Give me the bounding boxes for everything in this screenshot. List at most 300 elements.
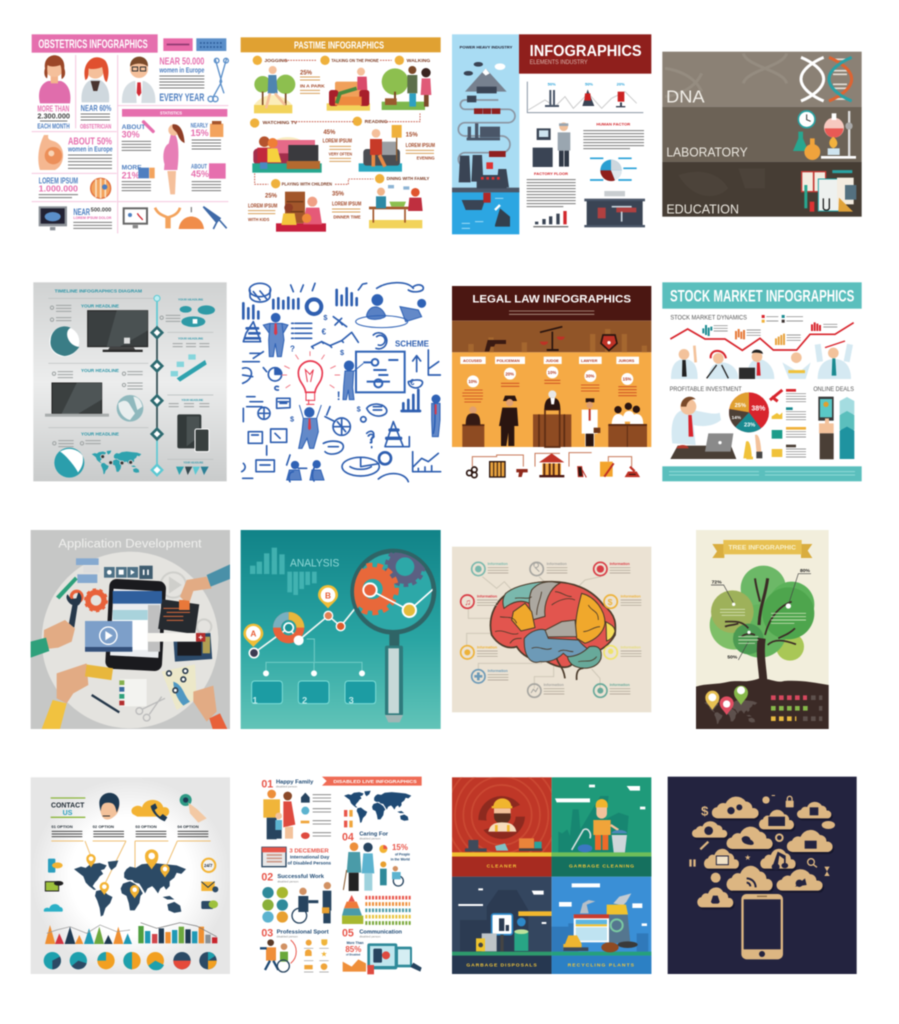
captions: Information	[621, 594, 641, 598]
icon: gun	[485, 340, 506, 351]
scene: reading	[359, 125, 402, 172]
device: monitor	[88, 311, 148, 352]
stats and pointers: 72%	[712, 580, 722, 586]
caring illustration	[343, 842, 403, 891]
captions	[477, 562, 641, 694]
canopy captions	[720, 603, 806, 643]
scene: playing with children	[276, 192, 326, 232]
section headers: 01	[261, 778, 273, 790]
figure: lawyer	[582, 398, 600, 446]
left icons	[44, 859, 63, 912]
step labels: TALKING ON THE PHONE	[331, 58, 379, 64]
step labels: PLAYING WITH CHILDREN	[282, 181, 332, 187]
sport medals: ★	[321, 950, 327, 959]
hand: lower right	[193, 686, 227, 729]
chart: donut	[277, 616, 300, 639]
options: 01 OPTION	[51, 824, 73, 829]
org lines	[266, 639, 362, 672]
mini bar clusters	[702, 322, 837, 345]
headlines: YOUR HEADLINE	[183, 461, 204, 465]
stats and pointers	[711, 568, 811, 661]
ground map	[704, 699, 757, 724]
step labels: WALKING	[407, 58, 430, 64]
section headers	[261, 778, 402, 940]
doodle: charts and small icons: SCHEME	[395, 339, 429, 349]
illustration: brain	[490, 582, 615, 680]
sport medals	[304, 939, 329, 972]
captions: LOREM IPSUM	[332, 201, 362, 207]
percentage text: 30%	[586, 374, 594, 379]
cloud shadows	[693, 799, 834, 909]
tile: tree infographic	[696, 530, 829, 729]
icon: education supplies	[802, 172, 856, 212]
icon: laboratory equipment	[793, 111, 856, 160]
chart: pie 38 23 14 25: 38%	[751, 405, 766, 412]
hand: lower left with card	[42, 663, 113, 729]
icon: cell	[91, 178, 111, 198]
marker: B: B	[325, 590, 331, 600]
panel: education band	[662, 162, 862, 217]
wheelchair handshake	[292, 882, 331, 923]
stat: 15% of people	[379, 843, 410, 862]
doodle: charts and small icons: $	[323, 313, 327, 322]
icon: magnifying glass	[349, 548, 434, 722]
panel: navy	[668, 777, 857, 974]
connector line	[472, 453, 632, 467]
doodle: charts and small icons	[242, 283, 441, 482]
person: woman	[39, 55, 70, 103]
panel: dna band	[662, 52, 862, 107]
role label text: JUDGE	[546, 359, 559, 363]
hand: left with wrench	[31, 620, 75, 658]
map: world	[74, 861, 186, 917]
media player bar	[104, 566, 153, 579]
role labels	[460, 357, 639, 364]
figure: jurors	[608, 403, 647, 447]
panel: industry column: POWER HEAVY INDUSTRY	[460, 44, 513, 49]
captions: LOREM IPSUM	[323, 138, 352, 144]
title: pastime: PASTIME INFOGRAPHICS	[294, 41, 384, 52]
illustration: investor at desk	[670, 397, 736, 459]
title: pastime	[241, 37, 441, 52]
folders 1 2 3: 2	[302, 695, 307, 705]
role label text: POLICEMAN	[497, 359, 520, 363]
headlines: YOUR HEADLINE	[81, 368, 119, 373]
nodes white	[263, 670, 365, 676]
title: stock market	[662, 282, 862, 309]
text: near 50,000: EVERY YEAR	[159, 92, 204, 104]
heading: contact us: CONTACT	[51, 802, 85, 809]
stat: near 500,000: LOREM IPSUM DOLOR	[73, 215, 111, 220]
panel: laboratory band: LABORATORY	[666, 146, 748, 160]
section headers: Happy Family	[276, 780, 313, 786]
icon: support agent	[99, 793, 119, 820]
percentage text: 10%	[468, 379, 477, 384]
section headers: Communication	[359, 929, 402, 935]
captions: 45%	[323, 130, 336, 136]
stat: more than 85%: More Than	[347, 941, 363, 945]
cloud glyph icons	[704, 804, 818, 904]
section headers: disabled person	[277, 879, 299, 883]
icons: hands raised	[743, 435, 762, 459]
tile: business doodles	[241, 282, 441, 482]
folders 1 2 3: 3	[349, 695, 354, 705]
section headers: disabled person	[359, 934, 381, 938]
options: 04 OPTION	[177, 824, 199, 829]
stats: left and right percentages: NEARLY	[191, 122, 208, 129]
percentage text	[468, 370, 631, 384]
hand: right top	[180, 564, 230, 601]
section headers: 03	[261, 928, 273, 940]
timeline spine	[152, 295, 162, 475]
circle icons	[262, 887, 288, 923]
tile: stock market infographics	[662, 282, 862, 481]
person: doctor man	[122, 57, 155, 103]
icon: scales of justice	[540, 327, 565, 351]
chart: pie 38 23 14 25: 23%	[744, 422, 755, 428]
text blocks	[50, 305, 209, 447]
stats: left and right percentages: 21%	[122, 170, 140, 180]
chart: pie 38 23 14 25: 25%	[735, 403, 746, 409]
device: tablet and phone	[177, 414, 209, 452]
row 2 left pair	[33, 282, 441, 482]
phone screen	[173, 633, 212, 662]
chart: line with icons: 50%	[585, 82, 593, 87]
icon: smartphone	[741, 894, 783, 959]
headlines: YOUR HEADLINE	[81, 303, 119, 308]
chart: triangle peaks	[45, 925, 132, 944]
devices illustration	[367, 943, 422, 974]
ghost play icon	[161, 572, 211, 634]
panel: education band: EDUCATION	[666, 202, 739, 216]
tile: contact us	[31, 777, 230, 974]
step labels: JOGGING	[264, 58, 288, 64]
stat: lorem ipsum 1,000,000	[39, 176, 78, 198]
chart: area mini	[343, 959, 366, 972]
stat: lorem ipsum 1,000,000: 1.000.000	[39, 184, 78, 194]
title: infographics	[519, 34, 651, 74]
clouds tan	[692, 797, 833, 907]
role label text	[463, 359, 635, 363]
headlines: YOUR HEADLINE	[181, 398, 204, 402]
stat: 15% of people: in the World	[391, 858, 410, 862]
icon: cloud with phone	[132, 800, 169, 821]
captions: Information	[610, 683, 630, 687]
chart: pie 38 23 14 25	[729, 392, 769, 432]
stats and pointers: 50%	[727, 655, 738, 661]
chart: line with icons: 50%	[548, 82, 556, 87]
panel: garbage disposals	[452, 877, 552, 974]
icon: tablet hand	[818, 397, 834, 459]
icon: white dna	[801, 57, 824, 101]
section headers: Caring For	[359, 831, 388, 837]
heading: human factor: HUMAN FACTOR	[596, 122, 630, 127]
stats: left and right percentages: 30%	[122, 130, 140, 140]
figure: policeman	[499, 396, 518, 446]
section headers: disabled person	[277, 934, 298, 938]
percentage text: 15%	[623, 377, 631, 382]
options: 03 OPTION	[135, 824, 157, 829]
text: near 50,000	[159, 56, 205, 104]
headlines: YOUR HEADLINE	[178, 297, 204, 301]
role label text: LAWYER	[581, 359, 598, 363]
section headers: disabled person	[276, 785, 297, 789]
bars chart ghost	[250, 548, 317, 595]
stat: more than 85%: of Disabled	[346, 953, 361, 957]
panel: beige	[452, 547, 651, 712]
section headers: 04	[342, 832, 354, 844]
chart: line with icons	[527, 82, 643, 113]
title: obstetrics: OBSTETRICS INFOGRAPHICS	[38, 37, 148, 51]
stats: left and right percentages: MORE	[122, 165, 142, 172]
scene: watching tv	[252, 136, 322, 173]
chart legend	[762, 315, 803, 323]
icon: wrench and gears	[56, 577, 107, 627]
doodle: charts and small icons: $	[340, 348, 344, 357]
stat: near 60%	[80, 103, 112, 131]
captions: 25%	[265, 194, 278, 200]
tile: pastime infographics	[241, 37, 441, 232]
circle icons with information captions: $	[608, 597, 613, 607]
title: legal law	[452, 286, 651, 321]
location pins	[705, 686, 748, 715]
heading: contact us: US	[63, 810, 73, 817]
icon: cloud cluster	[180, 305, 215, 327]
tile: brain infographic	[452, 547, 651, 712]
figure: judge at bench	[533, 390, 571, 447]
text: 3 december	[288, 849, 332, 865]
doodle: charts and small icons: ?	[290, 345, 295, 354]
stats: left and right percentages: ABOUT	[122, 124, 145, 131]
tile: heavy industry infographics	[452, 34, 651, 234]
captions: Information	[621, 645, 641, 649]
headlines	[81, 297, 204, 465]
step markers	[250, 56, 404, 188]
step labels	[263, 58, 430, 187]
captions: Information	[544, 683, 564, 687]
stat: about 50%: women in Europe	[67, 147, 113, 154]
marker: A	[243, 624, 263, 647]
scissors	[136, 697, 165, 721]
row 3 right pair	[452, 530, 829, 729]
row 1 right pair	[452, 34, 862, 234]
sport illustration	[260, 939, 296, 972]
chart: pie	[590, 158, 637, 181]
title: infographics: ELEMENTS INDUSTRY	[530, 60, 588, 66]
captions: Information	[610, 562, 630, 566]
presentation board	[356, 352, 405, 392]
icon: tablet device	[105, 579, 166, 671]
folders 1 2 3: 1	[252, 695, 258, 705]
captions: LOREM IPSUM	[248, 203, 278, 209]
stat: near 60%: NEAR 60%	[81, 103, 112, 113]
pyramid	[342, 895, 363, 924]
heading: profitable investment: PROFITABLE INVESTMENT	[670, 386, 742, 393]
map: teal world	[92, 451, 141, 474]
banner: disabled live: DISABLED LIVE INFOGRAPHICS	[333, 779, 417, 784]
tile: application development	[31, 530, 230, 729]
map pins	[101, 455, 133, 465]
captions: LOREM IPSUM	[406, 143, 435, 149]
tile: recycling and garbage	[447, 760, 651, 974]
small note cards	[76, 558, 99, 583]
row 2 right pair	[452, 282, 862, 481]
captions: EVENING	[417, 156, 435, 162]
title: legal law: LEGAL LAW INFOGRAPHICS	[472, 294, 631, 306]
panel: industry column	[452, 34, 519, 234]
stat: more than 2,300,000: 2.300.000	[37, 113, 70, 120]
stat: 15% of people: of People	[395, 852, 410, 856]
checklist	[119, 679, 147, 706]
options	[51, 824, 208, 837]
percentage text: 20%	[505, 371, 514, 376]
scene: dining with family	[369, 185, 423, 228]
panel: dna band: DNA	[666, 86, 705, 106]
family illustration	[263, 790, 295, 839]
stat: more than 85%	[345, 941, 363, 957]
row 4 right pair	[447, 760, 857, 974]
scene: talking on the phone	[327, 68, 370, 111]
chart: pie 38 23 14 25: 14%	[732, 415, 742, 420]
doodle: charts and small icons: $	[290, 415, 294, 424]
chart: bars	[533, 211, 568, 227]
stat: near 500,000: 500.000	[91, 208, 111, 214]
panel: icons band	[452, 321, 651, 352]
panel: grey white background	[31, 777, 230, 974]
icon: ultrasound monitor	[39, 206, 67, 230]
globe: teal sphere	[54, 448, 84, 478]
video panel	[85, 621, 132, 652]
section headers: disabled person	[359, 836, 381, 840]
heading: human factor	[583, 122, 644, 149]
stats: left and right percentages: 45%	[191, 169, 209, 179]
icons: law items	[467, 453, 638, 478]
ground	[696, 678, 829, 729]
section headers: Successful Work	[277, 874, 324, 880]
text: 3 december: 3 DECEMBER	[289, 849, 329, 855]
person: doctor woman	[81, 57, 109, 102]
captions: 15%	[406, 133, 418, 139]
panel: garbage cleaning	[552, 777, 651, 877]
tile: analysis	[241, 530, 441, 729]
icon: triangles	[176, 467, 209, 475]
right icons: 24/7	[204, 863, 213, 868]
stat: about 50%: ABOUT 50%	[68, 136, 112, 147]
figure: accused	[462, 406, 484, 447]
step labels: DINING WITH FAMILY	[387, 176, 430, 182]
role label text: ACCUSED	[463, 359, 482, 363]
marker: B	[318, 585, 338, 608]
panel: recycling plants	[552, 877, 651, 974]
row 1 left pair	[32, 34, 441, 233]
section headers: 05	[342, 928, 354, 940]
icons small people	[344, 810, 353, 827]
floating icons: ★	[744, 853, 751, 862]
stat: 15% of people: 15%	[392, 843, 408, 852]
marker: A: A	[250, 629, 256, 639]
percentage discs	[467, 366, 633, 387]
row 4 left pair	[31, 777, 422, 974]
headlines: YOUR HEADLINE	[178, 336, 204, 340]
captions: VERY OFTEN	[329, 151, 352, 157]
panel: laboratory band	[662, 107, 862, 162]
legend items with icons	[770, 389, 806, 457]
percentage text: 10%	[548, 370, 556, 375]
icon: scissors	[208, 58, 228, 102]
tile: obstetrics infographics	[32, 34, 228, 233]
text: near 50,000: NEAR 50.000	[159, 56, 205, 67]
section headers: 02	[261, 872, 273, 884]
family icons	[301, 793, 331, 839]
heading: analysis: ANALYSIS	[290, 557, 339, 569]
title: obstetrics	[32, 34, 158, 53]
map with pins	[162, 664, 197, 710]
captions: Information	[477, 594, 497, 598]
text: near 50,000: women in Europe	[159, 66, 204, 75]
stats: left and right percentages	[122, 122, 221, 191]
chart: red line	[670, 323, 854, 350]
captions: 25%	[300, 70, 313, 76]
tile: disabled live infographics	[260, 777, 422, 974]
panel: garbage disposals: GARBAGE DISPOSALS	[466, 963, 537, 969]
panel: cream	[696, 530, 829, 729]
icon: womb	[38, 135, 63, 170]
charts: pies	[44, 952, 217, 970]
captions: Information	[477, 645, 497, 649]
people pictogram rows	[365, 898, 412, 923]
person: pregnant woman	[163, 124, 185, 194]
options: 02 OPTION	[93, 824, 114, 829]
fruit pictogram rows	[771, 698, 822, 719]
map: disabled world	[344, 791, 411, 823]
icons: bottom strip	[123, 207, 227, 229]
stat: more than 2,300,000: EACH MONTH	[37, 122, 70, 131]
tile: legal law infographics	[452, 286, 651, 478]
right icons	[201, 859, 218, 909]
title: application development: Application Development	[58, 537, 202, 551]
captions: 35%	[332, 192, 345, 198]
captions: DINNER TIME	[333, 215, 361, 221]
captions: WITH KIDS	[248, 217, 270, 223]
stat: more than 2,300,000: MORE THAN	[37, 104, 69, 114]
heading: factory floor	[527, 171, 576, 207]
captions: IN A PARK	[300, 83, 325, 89]
row 3 left pair	[31, 530, 441, 729]
stat: near 500,000	[73, 207, 112, 228]
footer strip	[662, 466, 862, 481]
nodes	[249, 611, 345, 658]
icons: medicine and scale	[138, 120, 226, 179]
stat: more than 2,300,000	[37, 104, 70, 131]
panel: roles band	[452, 352, 651, 447]
panel: grey background	[31, 530, 230, 729]
floating icons	[689, 795, 835, 883]
heading: stock market dynamics: STOCK MARKET DYNAMICS	[670, 315, 747, 322]
panel: cleaner: CLEANER	[487, 863, 517, 869]
map pins	[86, 849, 170, 898]
doodle: charts and small icons: !	[337, 389, 341, 403]
chart: line with points	[254, 590, 370, 653]
calendar	[262, 847, 286, 867]
title ribbon	[712, 540, 812, 558]
stat: about 50%	[67, 136, 113, 168]
captions	[248, 70, 435, 223]
panel: cleaner	[451, 776, 552, 878]
heading: statistics: STATISTICS	[160, 110, 183, 116]
stats: left and right percentages: 15%	[191, 128, 209, 138]
icon: badge	[601, 335, 617, 351]
illustration: control room	[584, 191, 645, 227]
